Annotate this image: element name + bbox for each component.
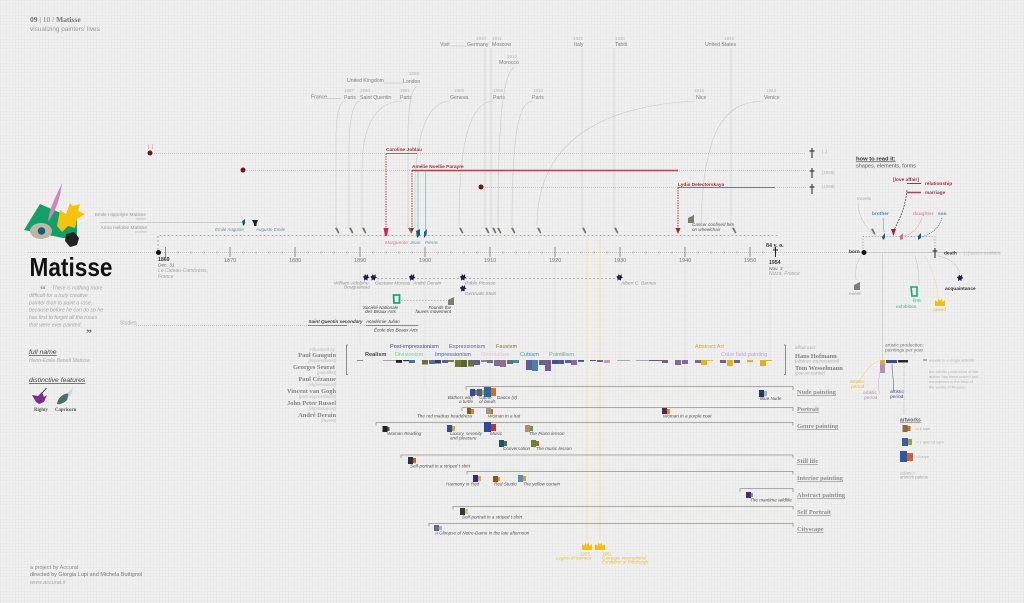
legend: how to read: event [849, 291, 861, 297]
parents and siblings: mother [135, 230, 148, 234]
legend: artworks: artworks [900, 418, 921, 424]
influenced by: [impressionist] [308, 406, 337, 411]
quote: because before he can do so he [29, 308, 103, 314]
travels: labels: Nice [696, 95, 706, 101]
influenced: influenced: [795, 345, 816, 350]
influenced by: [fauvist] [320, 418, 337, 423]
genre: abstract painting [740, 488, 846, 502]
Amelie Noellie Parayre [408, 164, 678, 233]
travels: labels: 1887 [344, 88, 355, 93]
quote: painter than to paint a rose, [28, 300, 92, 306]
full name: full name [29, 349, 57, 356]
travels: labels: Paris [344, 95, 356, 101]
artistic periods: Orientalism [481, 352, 510, 358]
quote: that were ever painted. [29, 322, 82, 328]
travels: labels: 1890 [360, 88, 371, 93]
awards: 1925 [580, 552, 591, 556]
genre: cityscape [429, 524, 824, 536]
genre: interior painting: Harmony in Red [446, 482, 480, 486]
parents and siblings [95, 212, 286, 234]
relationships: [..] [148, 144, 153, 149]
legend: how to read: relationship [925, 181, 952, 187]
icon: capricorn: Capricorn [55, 408, 77, 413]
awards: Legion d'Honneur [556, 556, 592, 560]
genre: portrait: The red madras headdress [417, 414, 473, 418]
travels: labels: Tahiti [615, 42, 627, 48]
travels: labels: Paris [532, 95, 544, 101]
Lydia Delectorskaya [676, 182, 775, 234]
death: 1954 [769, 260, 781, 266]
travels: labels: 1891 [400, 88, 411, 93]
travels: labels: Visit [440, 42, 450, 48]
quote: has first to forget all the roses [29, 315, 97, 321]
travels: labels: Venice [764, 95, 780, 101]
influenced by: Georges Seurat [293, 364, 336, 371]
birth: Le Cateau-Cambrésis, [158, 268, 208, 274]
timeline upper dashed line and travel markers [158, 228, 778, 250]
genre: genre painting: Conversation [503, 446, 531, 451]
travels: labels: London [403, 79, 420, 85]
genre: portrait: Woman in a purple coat [663, 414, 712, 418]
death crosses: [1958] [822, 170, 835, 175]
genre: nude painting [448, 386, 837, 404]
travels: labels: 1900 [454, 88, 465, 93]
legend: how to read: shapes, elements, forms [856, 164, 916, 170]
legend: how to read: award [933, 307, 946, 313]
acquaintances [334, 274, 657, 297]
legend: artistic production: equals to a single artwork [929, 358, 974, 362]
acquaintances: André Derain [412, 280, 442, 286]
legend: artistic production: period [864, 395, 878, 401]
legend: artistic production: the artistic production of the [929, 369, 979, 374]
influenced by: Vincent van Gogh [287, 388, 336, 395]
influenced [346, 345, 843, 376]
travels: labels: Geneva [450, 95, 468, 101]
studies [120, 319, 420, 332]
quote: ” [86, 326, 92, 340]
genre: cityscape: A Glimpse of Notre-Dame in the late afternoon [434, 530, 530, 536]
travels: labels: 1925 [573, 36, 584, 41]
legend: artworks: < 1 sqm [916, 426, 931, 431]
travels: labels: 1906 [493, 88, 504, 93]
distinctive features: distinctive features [29, 377, 86, 384]
travels: labels: United Kingdom [347, 78, 384, 84]
Lydia Delectorskaya: Lydia Delectorskaya [678, 182, 725, 188]
quote [28, 282, 103, 340]
travels: labels: 1910 [476, 36, 487, 41]
header: 09 | 10 / Matisse [30, 15, 81, 24]
main timeline axis: 1950 [744, 258, 756, 264]
influenced by: influenced by: [309, 347, 337, 352]
acquaintances: Gustave Moreau [375, 280, 411, 286]
death: Nov. 3 [769, 266, 783, 272]
acquaintances: Albert C. Barnes [620, 280, 657, 286]
legend: how to read: [..] source available [964, 250, 1002, 256]
vertical guide lines [360, 237, 770, 540]
artistic periods: Expressionism [449, 344, 486, 350]
Caroline Joblau [384, 147, 422, 236]
travels: labels: Morocco [499, 60, 519, 66]
influenced by: [pointillist] [316, 370, 337, 375]
studies: Saint Quentin secondary [308, 319, 363, 324]
legend: artistic production: author has been scaled and [929, 374, 978, 379]
travels: labels: 1918 [694, 88, 705, 93]
legend: how to read [849, 156, 1002, 313]
main timeline axis: 1940 [679, 258, 691, 264]
genre: genre painting: Music [490, 431, 503, 436]
studies: École des Beaux Arts [374, 326, 418, 332]
influenced: [abstract expressionist] [794, 358, 840, 364]
legend: artistic production [850, 253, 979, 414]
travels: labels: France [311, 94, 327, 100]
death: Nizza, France [769, 271, 800, 277]
legend: artworks: >3 sqm [916, 454, 930, 459]
legend: how to read: born [849, 249, 860, 255]
travels: curves [336, 48, 763, 228]
event: cancer [688, 215, 734, 232]
exhibition and events: Société Nationale [363, 305, 399, 310]
main timeline axis: 1900 [419, 258, 431, 264]
travels: labels: Germany [467, 42, 489, 48]
legend: artistic production: artistic [850, 379, 864, 385]
quote: difficult for a truly creative [29, 293, 88, 299]
header: visualizing painters' lives [30, 26, 100, 33]
Caroline Joblau: Caroline Joblau [386, 147, 422, 153]
genre: still life: Still life [797, 458, 818, 465]
relationships [148, 144, 835, 236]
influenced by: André Derain [298, 412, 336, 419]
death [766, 243, 800, 277]
genre: interior painting [446, 472, 844, 486]
genre: interior painting: Red Studio [494, 482, 517, 486]
genre: nude painting: Nude painting [797, 389, 837, 396]
travels: labels: Italy [574, 42, 584, 48]
legend: artistic production: artistic [863, 390, 877, 396]
legend: artworks [900, 418, 944, 480]
genre: genre painting: Woman Reading [387, 431, 422, 436]
influenced: Tom Wesselmann [795, 365, 843, 372]
travels: labels: 1911 [492, 36, 502, 41]
genre: self portrait: Self-portrait in a striped t-shirt [462, 514, 523, 520]
influenced by: [impressionist] [308, 382, 337, 387]
Amelie Noellie Parayre: Amélie Noellie Parayre [412, 164, 464, 170]
artistic periods: Fauvism [496, 344, 517, 350]
travels: labels: Paris [493, 95, 505, 101]
death crosses: [1998] [822, 184, 835, 189]
artistic periods: Impressionism [435, 352, 471, 358]
legend: how to read: [love affair] [893, 177, 919, 183]
full name [29, 349, 90, 364]
artistic periods: Abstract Art [695, 344, 724, 350]
legend: artistic production: period [890, 394, 904, 400]
legend: artistic production: period [851, 384, 865, 390]
parents and siblings: father [136, 217, 147, 221]
influenced: [pop art painter] [794, 370, 826, 376]
genre: self portrait [453, 506, 832, 520]
header [30, 15, 100, 33]
birth: France [158, 274, 174, 280]
acquaintances: William-Adolphe [334, 280, 369, 286]
genre: nude painting: Blue Nude [760, 396, 782, 401]
legend: artistic production: the works of Picasso [929, 384, 966, 390]
quote: There is nothing more [52, 286, 103, 292]
travels: labels: Paris [400, 95, 412, 101]
legend: artistic production: artistic [890, 389, 904, 395]
distinctive features [29, 377, 86, 413]
event: cancer: Cancer confined him [692, 222, 734, 227]
genre: nude painting: Bathers with [448, 395, 473, 400]
legend: how to read: travels [857, 196, 872, 202]
studies: Studies [120, 320, 137, 326]
credits: www.accurat.it [30, 580, 66, 586]
main timeline axis: 1890 [354, 258, 366, 264]
parents and siblings: Anna Heloise Matisse [101, 225, 147, 231]
exhibition and events: Founds the [428, 305, 451, 310]
death crosses: [..] [822, 149, 827, 154]
parents and siblings: Auguste Emile [255, 227, 286, 232]
artistic periods: Cubism [520, 352, 539, 358]
travels: labels: 1914 [533, 88, 544, 93]
awards: Carnegie International [602, 556, 647, 560]
legend: artistic production: artistic production: [885, 342, 924, 348]
main timeline axis: 1910 [484, 258, 496, 264]
genre: self portrait: Self Portrait [797, 509, 832, 516]
acquaintances: Bouguereau [344, 284, 370, 290]
children: Marguerite [385, 240, 408, 246]
genre: portrait [417, 406, 820, 418]
title: Matisse [30, 252, 112, 282]
birth: Dec. 31 [158, 262, 175, 268]
legend: how to read: son [938, 212, 947, 217]
credits [30, 565, 142, 586]
children: Pierre [425, 240, 438, 246]
travels: labels: Moscow [492, 42, 511, 48]
influenced by: Paul Gauguin [298, 352, 336, 359]
artistic periods: Color field painting [721, 352, 767, 358]
travels: labels: 1898 [409, 71, 420, 76]
legend: how to read: exhibition [896, 304, 917, 310]
genre: nude painting: a turtle [459, 399, 473, 404]
travels: labels: 1912 [507, 54, 518, 59]
legend: artworks: artwork palette [900, 474, 929, 480]
credits: a project by Accurat [30, 565, 79, 571]
legend: how to read: brother [872, 211, 889, 217]
artistic periods: Pointillism [549, 352, 575, 358]
genre: portrait: Portrait [797, 406, 820, 413]
artistic periods [365, 344, 767, 358]
legend: artistic production: paintings per year [885, 348, 924, 354]
legend: how to read: daughter [913, 211, 934, 217]
main timeline axis [28, 243, 1000, 280]
influenced by [287, 347, 337, 423]
genre: abstract painting: Abstract painting [797, 492, 846, 499]
genre: genre painting: Luxury, serenity [450, 431, 483, 436]
awards: 1951 [602, 552, 613, 556]
genre: interior painting: Interior painting [797, 475, 844, 482]
birth: 1869 [158, 257, 170, 263]
full name: Henri-Émile-Benoît Matisse [29, 357, 90, 364]
exhibition and events [363, 295, 454, 314]
influenced by: [post-impressionist] [298, 394, 337, 399]
genre: genre painting: The Piano lesson [529, 431, 565, 436]
genre: still life: Self-portrait in a striped t-shirt [410, 464, 471, 468]
acquaintances: Pablo Picasso [465, 280, 496, 286]
travels: labels: Saint Quentin [360, 95, 392, 101]
artistic periods: Post-impressionism [390, 344, 439, 350]
travels: labels: 1945 [724, 36, 735, 41]
awards [556, 542, 649, 564]
exhibition and events: fauves movement [415, 309, 452, 314]
legend: how to read: marriage [925, 190, 946, 196]
parents and siblings: Emile Hippolyte Matisse [95, 212, 146, 218]
main timeline axis: 1920 [549, 258, 561, 264]
influenced by: John Peter Russel [287, 400, 336, 407]
legend: how to read: first [913, 298, 921, 304]
genre: interior painting: The yellow curtain [523, 482, 560, 486]
legend: artworks: colors = [900, 470, 916, 476]
exhibition and events: des Beaux-Arts [365, 309, 397, 314]
genre: nude painting: of bowls [479, 399, 497, 404]
legend: how to read: death [944, 250, 957, 256]
studies: Académie Julian [365, 319, 400, 324]
children [385, 170, 438, 246]
influenced: Hans Hofmann [795, 353, 837, 360]
genre: genre painting: The music lesson [536, 446, 572, 451]
genre: nude painting: Game [479, 395, 492, 400]
quote: “ [40, 282, 46, 296]
genre: cityscape: Cityscape [797, 526, 824, 533]
travels: labels [311, 36, 780, 101]
children: Jean [409, 240, 421, 246]
legend: how to read: acquaintance [945, 286, 976, 292]
genre: nude painting: Dance (II) [497, 395, 518, 400]
travels: labels: 1930 [615, 36, 626, 41]
influenced by: [impressionist] [308, 358, 337, 363]
birth [158, 257, 208, 280]
genre: portrait: Woman in a hat [488, 414, 521, 418]
bar chart: paintings per year [357, 360, 772, 371]
legend: artistic production: normalized to the total of [929, 379, 974, 384]
death: 84 y. o. [766, 243, 784, 249]
artistic periods: Divisionism [395, 352, 424, 358]
credits: directed by Giorgia Lupi and Michela Buttignol [30, 572, 142, 578]
icon: righty: Righty [34, 408, 48, 413]
acquaintances: Gertrude Stein [465, 291, 497, 297]
influenced by: Paul Cézanne [299, 376, 336, 383]
genre: still life [401, 455, 818, 468]
artistic periods: Realism [365, 352, 386, 358]
logo [24, 183, 85, 247]
death crosses [810, 148, 835, 194]
main timeline axis: 1930 [614, 258, 626, 264]
travels: labels: United States [705, 42, 737, 48]
awards: Exhibition at Pittsburgh [602, 560, 649, 564]
main timeline axis: 1870 [224, 258, 236, 264]
genre: abstract painting: The maritime wildlife [750, 498, 792, 502]
genre: genre painting: and pleasure [450, 436, 477, 440]
legend: how to read: how to read it: [856, 156, 896, 162]
event: cancer: on wheelchair [692, 227, 721, 232]
parents and siblings: Emile Auguste [215, 227, 244, 232]
genre: genre painting: Genre painting [797, 423, 839, 430]
travels: labels: 1943 [766, 88, 777, 93]
legend: artworks: > 1 and <3 sqm [916, 440, 944, 444]
main timeline axis: 1880 [289, 258, 301, 264]
genre: genre painting [376, 422, 839, 451]
